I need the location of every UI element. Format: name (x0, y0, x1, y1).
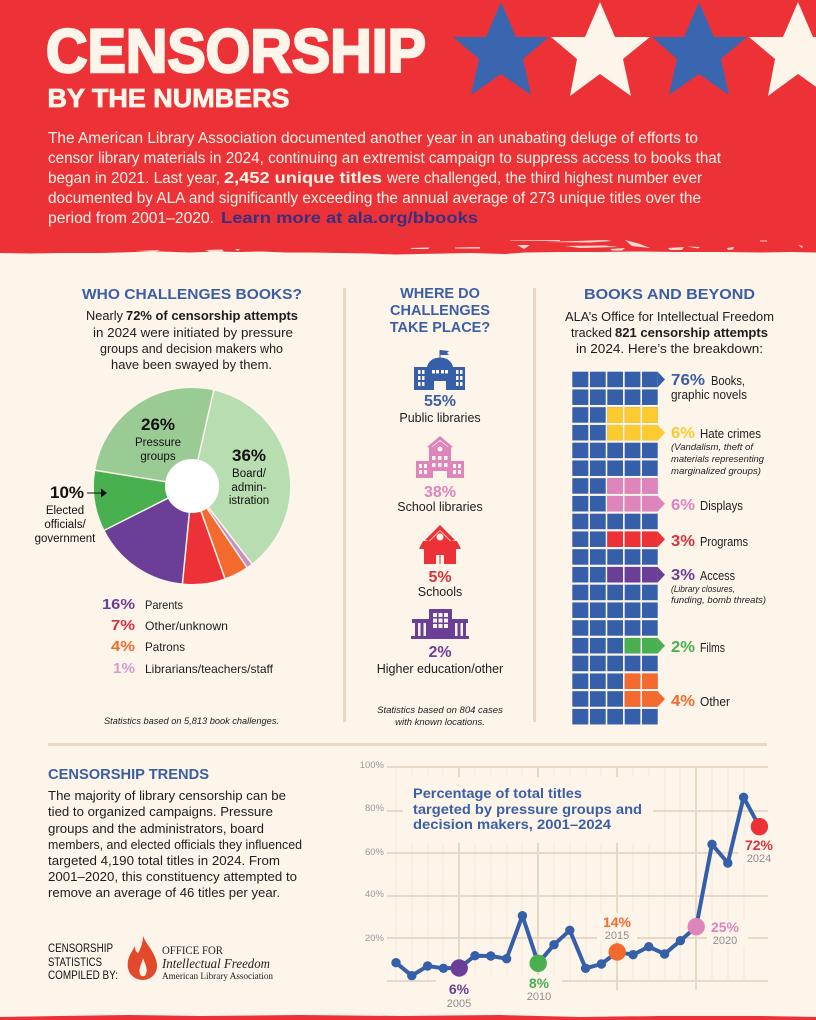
donut labels: 26% (141, 415, 175, 434)
label: programs: Programs (700, 535, 748, 549)
logo text: American Library Association (162, 972, 273, 982)
label: access: (Library closures, (671, 584, 735, 595)
heading: BOOKS AND BEYOND (584, 287, 755, 303)
panel: censorship trends (48, 767, 302, 982)
55% public libraries: 55% (424, 393, 456, 410)
trends text: 2001–2020, this constituency attempted to (48, 869, 297, 884)
label: programs (671, 533, 748, 550)
donut labels: Elected (46, 505, 84, 517)
label: hate crimes: materials representing (671, 454, 765, 465)
trends text: The majority of library censorship can be (48, 788, 286, 803)
divider lines (48, 288, 767, 746)
label: displays: Displays (700, 499, 743, 513)
chart title: Percentage of total titles (413, 786, 582, 801)
axis labels: 60% (365, 847, 385, 858)
intro text: were challenged, the third highest number ever (386, 170, 702, 187)
axis labels: 100% (360, 760, 385, 771)
5% schools: Schools (418, 585, 462, 599)
2% higher education: 2% (428, 644, 452, 661)
panel: books and beyond (565, 287, 774, 724)
heading: WHO CHALLENGES BOOKS? (82, 287, 302, 303)
intro text: documented by ALA and significantly exceeding the annual average of 273 unique titles over the (48, 190, 701, 207)
icon: flame logo (128, 936, 157, 980)
logo text: OFFICE FOR (162, 945, 223, 957)
icon: school library (416, 436, 464, 478)
2% higher education: Higher education/other (377, 662, 503, 676)
label: hate crimes: 6% (671, 425, 695, 442)
donut labels: Pressure (135, 437, 181, 449)
statistics note: Statistics based on 804 cases (377, 705, 503, 716)
credit label: STATISTICS (48, 957, 102, 969)
chart title: decision makers, 2001–2024 (413, 817, 612, 832)
data labels: 72% (745, 837, 774, 853)
intro text: Learn more at ala.org/bbooks (221, 210, 478, 227)
description: in 2024 were initiated by pressure (93, 325, 293, 340)
data labels: 2015 (605, 930, 629, 942)
intro text: The American Library Association documented another year in an unabating deluge of efforts to (48, 130, 698, 147)
description: ALA’s Office for Intellectual Freedom (565, 309, 774, 324)
chart title: targeted by pressure groups and (413, 802, 642, 817)
legend (102, 596, 274, 677)
axis labels: 40% (365, 889, 385, 900)
label: other: Other (700, 695, 730, 709)
heading: CHALLENGES (390, 303, 490, 319)
credit label (48, 943, 118, 982)
stars (453, 2, 816, 96)
statistics note (377, 705, 503, 728)
legend: 4% (111, 638, 135, 655)
donut labels: officials/ (44, 519, 86, 531)
55% public libraries: Public libraries (399, 411, 481, 425)
data labels: 2020 (713, 935, 737, 947)
intro text: censor library materials in 2024, continuing an extremist campaign to suppress access to books that (48, 150, 722, 167)
panel: where do challenges take place (377, 286, 503, 728)
label: books (671, 372, 747, 402)
data labels: 2005 (447, 998, 471, 1010)
trends text: groups and the administrators, board (48, 821, 264, 836)
statistics note: Statistics based on 5,813 book challenges. (104, 716, 279, 727)
label: films: Films (700, 641, 725, 655)
38% school libraries: 38% (424, 484, 456, 501)
waffle chart (572, 372, 665, 724)
donut labels: admin- (231, 482, 267, 494)
axis labels (360, 760, 385, 944)
axis labels: 80% (365, 803, 385, 814)
credit label: COMPILED BY: (48, 970, 118, 982)
trends text: targeted 4,190 total titles in 2024. From (48, 853, 280, 868)
legend: Patrons (145, 640, 185, 654)
data labels: 25% (711, 919, 740, 935)
logo text (161, 945, 273, 982)
label: books: graphic novels (671, 388, 747, 402)
line chart (360, 760, 780, 1015)
5% schools (418, 569, 462, 599)
intro text: period from 2001–2020. (48, 210, 214, 227)
description (86, 308, 298, 372)
logo text: Intellectual Freedom (161, 957, 270, 972)
description: 821 censorship attempts (615, 325, 768, 340)
label: other: 4% (671, 693, 695, 710)
legend: Parents (145, 598, 183, 612)
donut labels: Board/ (232, 468, 267, 480)
icon: school (419, 525, 461, 564)
2% higher education (377, 644, 503, 676)
label: access (671, 567, 766, 606)
icon: public library (414, 350, 465, 390)
donut labels: groups (140, 451, 176, 463)
donut labels: 36% (232, 446, 266, 465)
trends text: remove an average of 46 titles per year. (48, 885, 280, 900)
legend: 7% (111, 617, 135, 634)
data labels (447, 837, 774, 1010)
credit label: CENSORSHIP (48, 943, 113, 955)
trends text: tied to organized campaigns. Pressure (48, 804, 273, 819)
panel: who challenges books (35, 287, 302, 727)
intro text: began in 2021. Last year, (48, 170, 220, 187)
description: have been swayed by them. (111, 357, 272, 372)
intro text: 2,452 unique titles (224, 170, 382, 187)
statistics note: with known locations. (395, 717, 485, 728)
label: displays (671, 497, 743, 514)
label: films (671, 639, 725, 656)
trends text: members, and elected officials they influenced (48, 837, 302, 852)
data labels: 2010 (527, 991, 551, 1003)
title: CENSORSHIP (46, 17, 426, 85)
55% public libraries (399, 393, 481, 425)
intro text (48, 130, 722, 227)
data labels: 8% (529, 975, 550, 991)
label: displays: 6% (671, 497, 695, 514)
data line (396, 797, 759, 976)
heading: WHERE DO (400, 286, 480, 302)
description: 72% of censorship attempts (126, 308, 298, 323)
label: books: Books, (711, 374, 745, 388)
highlighted points (450, 818, 768, 977)
label: hate crimes: (Vandalism, theft of (671, 442, 754, 453)
description: tracked (571, 325, 612, 340)
38% school libraries: School libraries (397, 500, 483, 514)
description: groups and decision makers who (100, 341, 283, 356)
legend: 1% (113, 660, 135, 677)
label: hate crimes (671, 425, 765, 477)
subtitle: BY THE NUMBERS (48, 83, 290, 113)
heading: CENSORSHIP TRENDS (48, 767, 209, 783)
donut labels (35, 415, 269, 545)
label: other (671, 693, 730, 710)
label: access: 3% (671, 567, 695, 584)
bottom red band (0, 1015, 816, 1020)
description (565, 309, 774, 356)
heading: TAKE PLACE? (390, 320, 490, 336)
legend: 16% (102, 596, 135, 613)
donut labels: 10% (50, 483, 84, 502)
arrow (87, 488, 107, 498)
description: in 2024. Here’s the breakdown: (576, 341, 763, 356)
legend: Librarians/teachers/staff (145, 662, 274, 676)
38% school libraries (397, 484, 483, 514)
label: films: 2% (671, 639, 695, 656)
label: access: funding, bomb threats) (671, 595, 766, 606)
axis labels: 20% (365, 933, 385, 944)
data labels: 2024 (747, 853, 771, 865)
header banner (0, 0, 816, 254)
data points (391, 793, 748, 980)
donut labels: istration (229, 495, 269, 507)
label: access: Access (700, 569, 735, 583)
heading (390, 286, 490, 336)
chart title (413, 786, 642, 832)
data labels: 6% (449, 981, 470, 997)
legend: Other/unknown (145, 619, 228, 633)
5% schools: 5% (428, 569, 452, 586)
icon: higher education (411, 609, 469, 639)
label: books: 76% (671, 372, 705, 389)
label: programs: 3% (671, 533, 695, 550)
donut labels: government (35, 533, 96, 545)
label: hate crimes: Hate crimes (700, 427, 761, 441)
donut chart (94, 389, 280, 585)
description: Nearly (86, 308, 123, 323)
trends text (48, 788, 302, 900)
label: hate crimes: marginalized groups) (671, 466, 761, 477)
data labels: 14% (603, 914, 632, 930)
